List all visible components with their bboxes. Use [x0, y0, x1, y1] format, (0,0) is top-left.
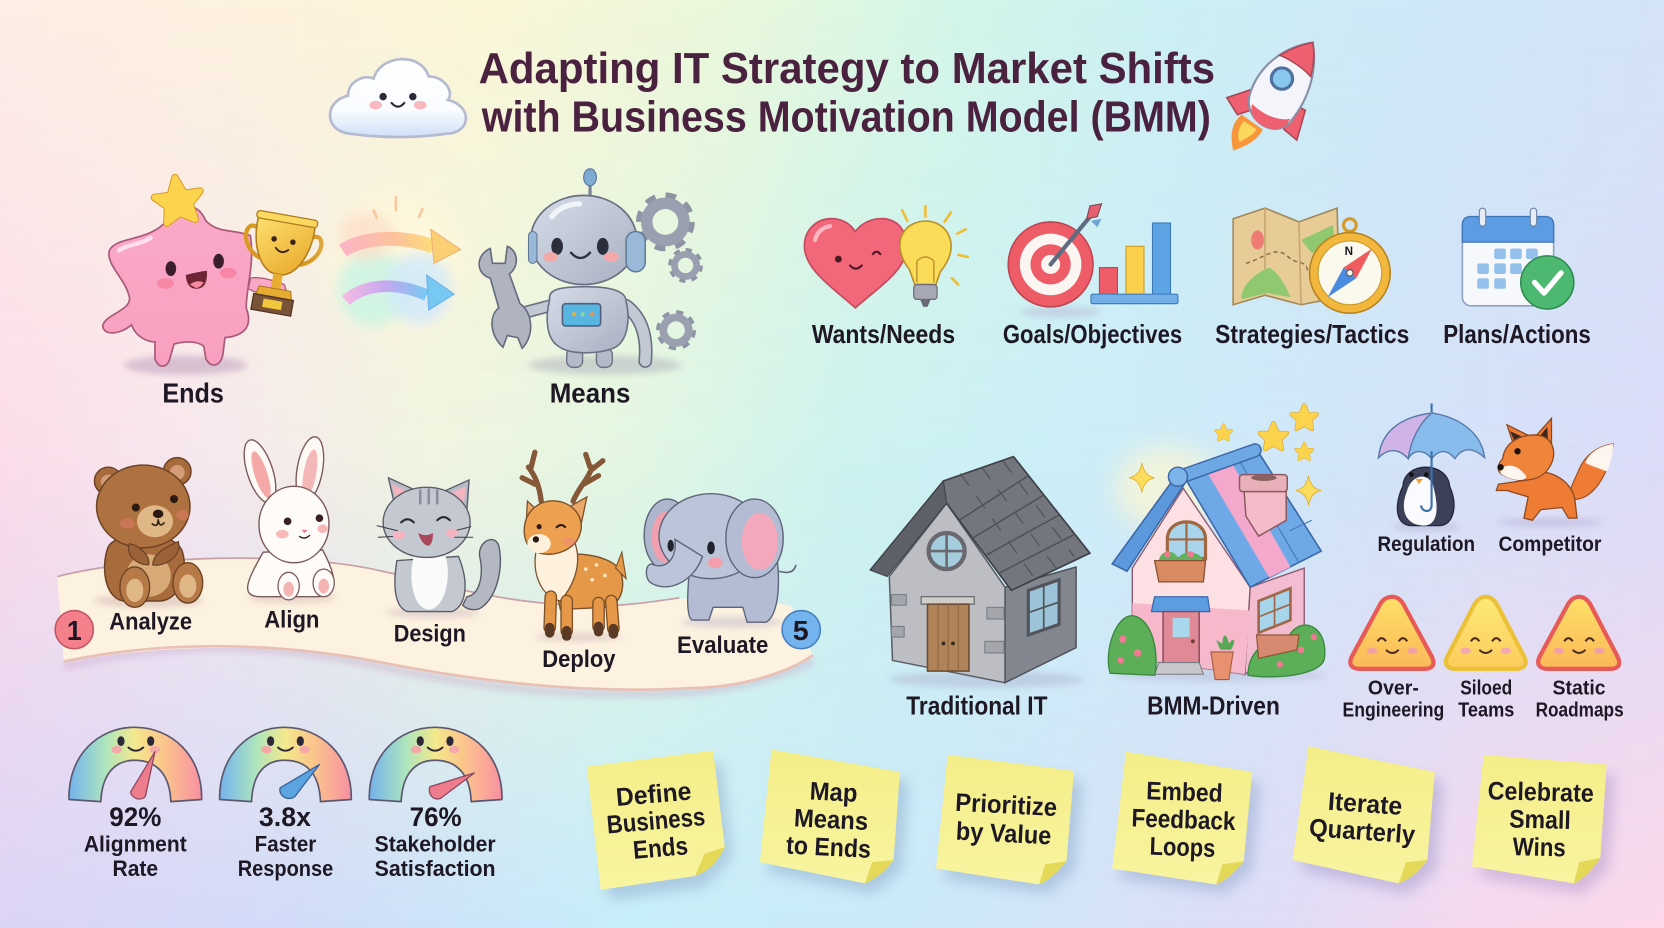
character: rabbit [238, 435, 336, 603]
panel: KPI gauges [69, 727, 502, 881]
sticky note: Map Means to Ends [760, 750, 908, 894]
sticky note: Prioritize by Value: Prioritize [955, 789, 1058, 822]
label: Align: Align [264, 607, 319, 634]
label: Strategies/Tactics: Strategies/Tactics [1215, 321, 1409, 349]
badge: step 1: 1 [67, 615, 82, 646]
sticky note: Define Business Ends [587, 751, 732, 900]
stat: 76% stakeholder satisfaction: Satisfaction [375, 856, 496, 881]
icon: heart and light bulb [804, 206, 968, 308]
sticky note: Map Means to Ends: Means [793, 804, 869, 836]
character: penguin with umbrella [1379, 403, 1485, 531]
panel: five-step journey path [55, 435, 820, 694]
sticky note: Iterate Quarterly: Quarterly [1308, 814, 1417, 850]
sticky note: Map Means to Ends: to Ends [785, 831, 872, 864]
arrows: rainbow transition [330, 193, 462, 333]
gauge: 92% alignment rate [69, 727, 202, 802]
character: deer [522, 452, 626, 641]
sticky note: Define Business Ends: Define [615, 778, 692, 812]
character: elephant [644, 494, 796, 628]
sticky note: Prioritize by Value [936, 755, 1082, 894]
label: Analyze: Analyze [109, 609, 192, 636]
panel: BMM elements row [804, 204, 1591, 349]
label: Static Roadmaps: Static [1553, 677, 1606, 699]
sticky note: Embed Feedback Loops: Feedback [1131, 804, 1237, 836]
title [479, 45, 1215, 142]
title: with Business Motivation Model (BMM) [481, 94, 1211, 142]
label: Goals/Objectives: Goals/Objectives [1003, 321, 1182, 349]
badge: step 1 [55, 611, 93, 649]
icon: smiling cloud [330, 59, 466, 137]
label: Over-Engineering [1342, 677, 1444, 722]
icon: map and compass [1233, 208, 1390, 313]
stat: 3.8x faster response [238, 802, 333, 881]
sticky note: Define Business Ends: Ends [632, 832, 689, 865]
sticky note: Embed Feedback Loops: Loops [1149, 833, 1216, 863]
badge: step 5 [782, 611, 820, 649]
stat: 3.8x faster response: Faster [255, 832, 317, 857]
label: Regulation: Regulation [1377, 533, 1475, 556]
sticky note: Iterate Quarterly: Iterate [1327, 788, 1403, 821]
label: Means: Means [550, 377, 630, 408]
label: BMM-Driven: BMM-Driven [1147, 693, 1280, 721]
label: Competitor: Competitor [1498, 533, 1601, 556]
panel: traditional IT vs BMM-driven houses [870, 405, 1327, 721]
label: Wants/Needs: Wants/Needs [812, 321, 955, 349]
stat: 76% stakeholder satisfaction: 76% [410, 802, 462, 832]
sticky note: Celebrate Small Wins [1472, 755, 1615, 894]
character: fox [1496, 418, 1613, 527]
label: Plans/Actions: Plans/Actions [1443, 321, 1591, 349]
ribbon path [57, 558, 813, 694]
gauge: 3.8x faster response [220, 727, 351, 802]
label: Static Roadmaps: Roadmaps [1536, 700, 1624, 722]
sticky note: Celebrate Small Wins: Small [1509, 805, 1571, 835]
character: cat [377, 478, 500, 618]
stat: 76% stakeholder satisfaction: Stakeholder [375, 832, 496, 857]
panel: external forces [1377, 403, 1613, 556]
label: Traditional IT: Traditional IT [906, 693, 1048, 721]
icon: map and compass: N [1345, 245, 1353, 258]
stat: 3.8x faster response: Response [238, 856, 333, 881]
label: Ends: Ends [162, 377, 224, 408]
gauge: 76% stakeholder satisfaction [369, 727, 502, 802]
badge: step 5: 5 [793, 615, 809, 646]
illustration: colorful BMM-driven house [1108, 405, 1327, 682]
icon: warning triangle, Static Roadmaps [1538, 597, 1619, 669]
label: Over-Engineering: Over- [1368, 677, 1419, 699]
stat: 3.8x faster response: 3.8x [259, 802, 311, 832]
icon: warning triangle, Siloed Teams [1446, 597, 1526, 669]
stat: 92% alignment rate: Alignment [84, 832, 187, 857]
sticky note: Celebrate Small Wins: Celebrate [1487, 777, 1594, 808]
stat: 92% alignment rate [84, 802, 187, 881]
character: Means robot with wrench and gears [479, 169, 700, 375]
stat: 92% alignment rate: 92% [109, 802, 161, 832]
label: Static Roadmaps [1536, 677, 1624, 722]
icon: warning triangle, Over-Engineering [1350, 597, 1433, 669]
sticky note: Embed Feedback Loops [1112, 752, 1261, 894]
panel: sticky note tips [587, 746, 1615, 900]
label: Over-Engineering: Engineering [1342, 700, 1444, 722]
sticky note: Map Means to Ends: Map [809, 777, 858, 808]
label: Siloed Teams: Teams [1458, 700, 1514, 722]
panel: pitfalls warning triangles [1342, 597, 1624, 722]
title: Adapting IT Strategy to Market Shifts [479, 45, 1215, 93]
character: Ends star with trophy [103, 174, 325, 375]
icon: target and bar chart [1008, 204, 1178, 317]
stat: 76% stakeholder satisfaction [375, 802, 496, 881]
sticky note: Prioritize by Value: by Value [955, 818, 1052, 850]
label: Deploy: Deploy [542, 646, 616, 673]
icon: rocket [1227, 42, 1314, 151]
label: Siloed Teams [1458, 677, 1514, 722]
stat: 92% alignment rate: Rate [112, 856, 158, 881]
character: bear [93, 458, 204, 607]
panel: ends vs means [103, 169, 700, 408]
label: Design: Design [394, 620, 466, 647]
sticky note: Define Business Ends: Business [606, 803, 706, 839]
sticky note: Embed Feedback Loops: Embed [1146, 777, 1223, 808]
sticky note: Iterate Quarterly [1293, 746, 1443, 894]
label: Siloed Teams: Siloed [1460, 677, 1512, 699]
illustration: traditional stone house [870, 457, 1090, 688]
icon: calendar with check [1462, 208, 1574, 309]
label: Evaluate: Evaluate [677, 632, 768, 659]
sticky note: Celebrate Small Wins: Wins [1512, 833, 1566, 862]
